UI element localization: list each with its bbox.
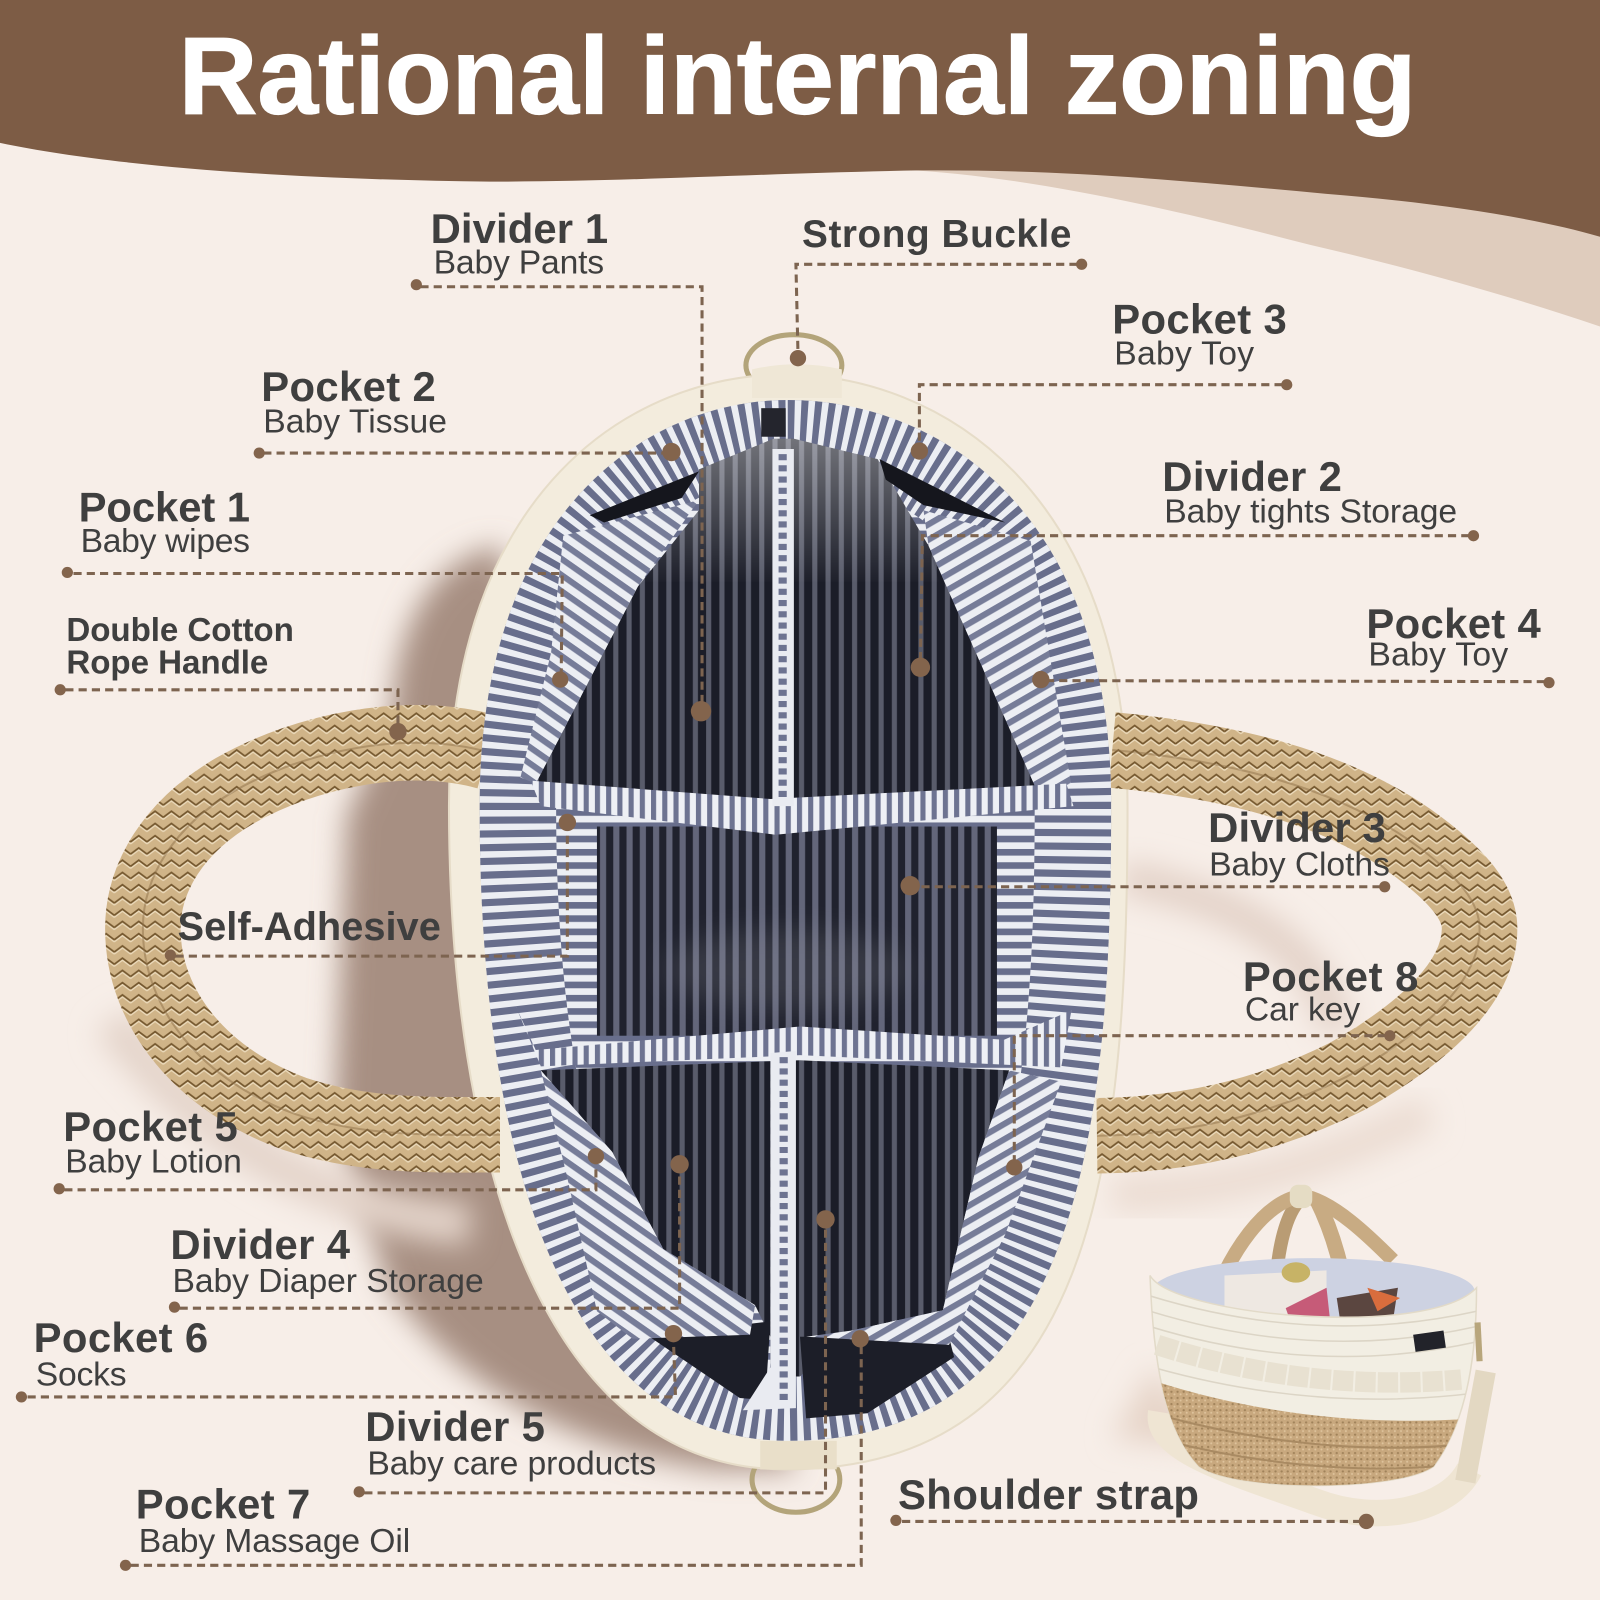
mini strap <box>1161 1412 1469 1513</box>
bottom left pocket wall <box>541 1070 755 1339</box>
callout: Divider 4: Baby Diaper Storage <box>172 1263 484 1300</box>
mini handles <box>1209 1185 1393 1318</box>
header swoosh: beige <box>898 153 1600 327</box>
callout: Divider 4 <box>169 1155 689 1313</box>
middle compartment <box>597 827 997 1036</box>
header band: brown <box>0 0 1600 237</box>
mini opening <box>1152 1258 1474 1337</box>
top metal ring <box>746 335 842 396</box>
callout: Pocket 7 <box>120 1330 869 1571</box>
callout: Double Cotton Rope Handle: Rope Handle <box>66 644 268 681</box>
top left pocket wall <box>520 500 699 784</box>
callout: Pocket 4: Pocket 4 <box>1366 600 1542 647</box>
mini basket product photo <box>1150 1185 1486 1513</box>
callout: Pocket 5 <box>54 1103 604 1194</box>
callout: Pocket 7: Pocket 7 <box>136 1480 310 1527</box>
callout: Pocket 4 <box>1032 600 1555 688</box>
callout: Pocket 2 <box>254 363 681 461</box>
top strap tab <box>752 364 842 398</box>
callout: Self-Adhesive <box>165 814 576 961</box>
background shadows <box>112 546 1429 1469</box>
bottom right pocket wall <box>806 1070 1061 1345</box>
callout: Pocket 5: Baby Lotion <box>65 1143 242 1180</box>
callout: Divider 5: Divider 5 <box>365 1403 545 1450</box>
callout: Pocket 2: Pocket 2 <box>261 363 436 410</box>
mini braid <box>1157 1345 1461 1382</box>
callout: Pocket 1: Pocket 1 <box>79 483 250 530</box>
callout: Pocket 8 <box>1006 953 1418 1176</box>
divider one and two <box>531 449 1073 835</box>
callout: Shoulder strap: Shoulder strap <box>898 1471 1199 1518</box>
left rope handle <box>143 743 500 1135</box>
callout: Pocket 6: Socks <box>36 1357 127 1394</box>
callout: Divider 1 <box>411 205 711 721</box>
callout: Double Cotton Rope Handle <box>55 612 407 740</box>
title: Rational internal zoning <box>179 15 1416 137</box>
callout: Shoulder strap <box>890 1471 1374 1529</box>
mini vertical strap <box>1465 1371 1486 1482</box>
callout: Divider 1: Baby Pants <box>434 244 604 281</box>
callout: Pocket 3 <box>911 296 1292 460</box>
bottom metal ring <box>752 1447 840 1512</box>
callout: Pocket 2: Baby Tissue <box>263 404 447 441</box>
top right pocket wall <box>923 510 1071 788</box>
mini rope rows <box>1150 1296 1477 1399</box>
callout: Strong Buckle: Strong Buckle <box>802 213 1071 256</box>
callout: Pocket 1 <box>62 483 568 688</box>
callout: Pocket 1: Baby wipes <box>81 523 250 560</box>
right rope handle <box>1097 750 1480 1136</box>
callout: Pocket 3: Baby Toy <box>1114 335 1254 372</box>
callout: Divider 2 <box>911 453 1479 677</box>
striped lining <box>469 388 1122 1449</box>
callout: Strong Buckle <box>790 213 1087 366</box>
bottom strap tab <box>760 1441 837 1469</box>
callout: Divider 5 <box>354 1210 835 1497</box>
callout: Divider 5: Baby care products <box>367 1445 656 1482</box>
organizer bag interior <box>469 364 1122 1469</box>
callout: Pocket 4: Baby Toy <box>1368 636 1508 673</box>
callout: Pocket 6: Pocket 6 <box>34 1314 208 1361</box>
callout: Divider 3: Divider 3 <box>1208 804 1386 851</box>
callout: Pocket 8: Car key <box>1245 991 1360 1028</box>
callout: Double Cotton Rope Handle: Double Cotton <box>66 612 294 649</box>
top compartments <box>536 439 1036 806</box>
brand tag <box>761 408 786 437</box>
mini body <box>1150 1276 1477 1485</box>
callout: Pocket 6 <box>16 1314 682 1403</box>
callout: Pocket 8: Pocket 8 <box>1243 953 1418 1000</box>
callout: Self-Adhesive: Self-Adhesive <box>178 905 441 949</box>
bottom compartments <box>541 1060 1009 1418</box>
callout: Divider 3: Baby Cloths <box>1209 847 1390 884</box>
callout: Divider 1: Divider 1 <box>431 205 608 252</box>
mini clip <box>1478 1322 1480 1361</box>
callout: Pocket 3: Pocket 3 <box>1112 296 1287 343</box>
callout: Pocket 7: Baby Massage Oil <box>139 1523 410 1560</box>
callout: Divider 2: Divider 2 <box>1162 453 1342 500</box>
bag rim <box>449 374 1128 1469</box>
callout: Divider 4: Divider 4 <box>170 1221 351 1268</box>
mini label <box>1413 1330 1446 1352</box>
callout: Pocket 5: Pocket 5 <box>63 1103 238 1150</box>
callout: Divider 2: Baby tights Storage <box>1164 493 1457 530</box>
callout: Divider 3 <box>901 804 1390 895</box>
mini jute base <box>1161 1383 1458 1486</box>
divider four and five <box>515 1005 1071 1410</box>
